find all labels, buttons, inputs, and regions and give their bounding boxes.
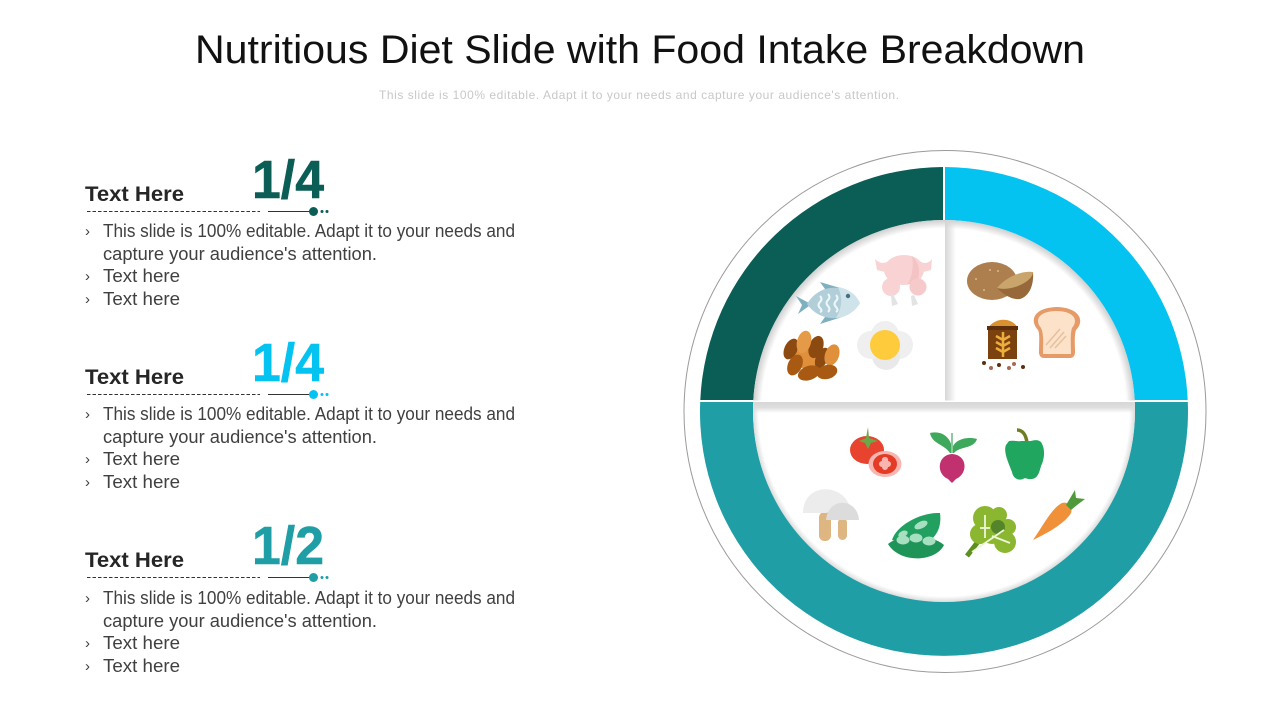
bullet list: capture your audience's attention. xyxy=(103,244,377,264)
fraction: 1/2 xyxy=(252,516,324,576)
bullet list xyxy=(85,221,515,309)
bullet list: This slide is 100% editable. Adapt it to your needs and xyxy=(103,221,515,241)
fraction: 1/4 xyxy=(252,333,324,393)
bullet list: › xyxy=(85,590,90,607)
icon: mushrooms xyxy=(803,489,859,541)
bullet list: This slide is 100% editable. Adapt it to your needs and xyxy=(103,404,515,424)
divider line with dots xyxy=(87,390,328,399)
icon: beans xyxy=(780,329,842,384)
icon: pea pod xyxy=(888,513,944,558)
panel: first quarter text block xyxy=(85,150,515,309)
plate dividers and inner shadow xyxy=(753,220,1135,602)
title: Nutritious Diet Slide with Food Intake Breakdown xyxy=(195,28,1085,72)
bullet list: Text here xyxy=(103,633,180,653)
bullet list: › xyxy=(85,223,90,240)
panel: half text block xyxy=(85,516,515,676)
bullet list: › xyxy=(85,406,90,423)
icon: grain sack xyxy=(982,320,1025,370)
bullet list: This slide is 100% editable. Adapt it to your needs and xyxy=(103,588,515,608)
bullet list xyxy=(85,588,515,676)
heading: Text Here xyxy=(85,549,184,572)
panel: second quarter text block xyxy=(85,333,515,492)
subtitle: This slide is 100% editable. Adapt it to your needs and capture your audience's attention. xyxy=(379,88,899,102)
heading: Text Here xyxy=(85,366,184,389)
ring segment: top-left quarter xyxy=(700,167,943,400)
bullet list: › xyxy=(85,268,90,285)
icon: spinach xyxy=(967,506,1016,556)
bullet list: capture your audience's attention. xyxy=(103,427,377,447)
ring segment: top-right quarter xyxy=(945,167,1188,400)
bullet list: › xyxy=(85,291,90,308)
bullet list: › xyxy=(85,451,90,468)
ring segment: bottom half xyxy=(700,402,1188,656)
icon: fried egg xyxy=(857,321,913,370)
icon: chicken xyxy=(875,255,932,306)
icon: fish xyxy=(796,282,860,324)
icon: bell pepper xyxy=(1005,430,1044,480)
icon: carrot xyxy=(1033,490,1085,540)
plate chart xyxy=(684,150,1206,672)
heading: Text Here xyxy=(85,183,184,206)
bullet list: Text here xyxy=(103,449,180,469)
bullet list xyxy=(85,404,515,492)
bullet list: capture your audience's attention. xyxy=(103,611,377,631)
bullet list: Text here xyxy=(103,656,180,676)
icon: beetroot xyxy=(930,432,977,483)
bullet list: Text here xyxy=(103,472,180,492)
icon: tomato xyxy=(850,427,902,477)
icon: potato xyxy=(967,262,1033,300)
bullet list: › xyxy=(85,474,90,491)
bullet list: › xyxy=(85,635,90,652)
divider line with dots xyxy=(87,573,328,582)
icon: bread slice xyxy=(1034,307,1080,358)
bullet list: Text here xyxy=(103,289,180,309)
fraction: 1/4 xyxy=(252,150,324,210)
outer ring xyxy=(684,150,1206,672)
divider line with dots xyxy=(87,207,328,216)
bullet list: › xyxy=(85,658,90,675)
bullet list: Text here xyxy=(103,266,180,286)
